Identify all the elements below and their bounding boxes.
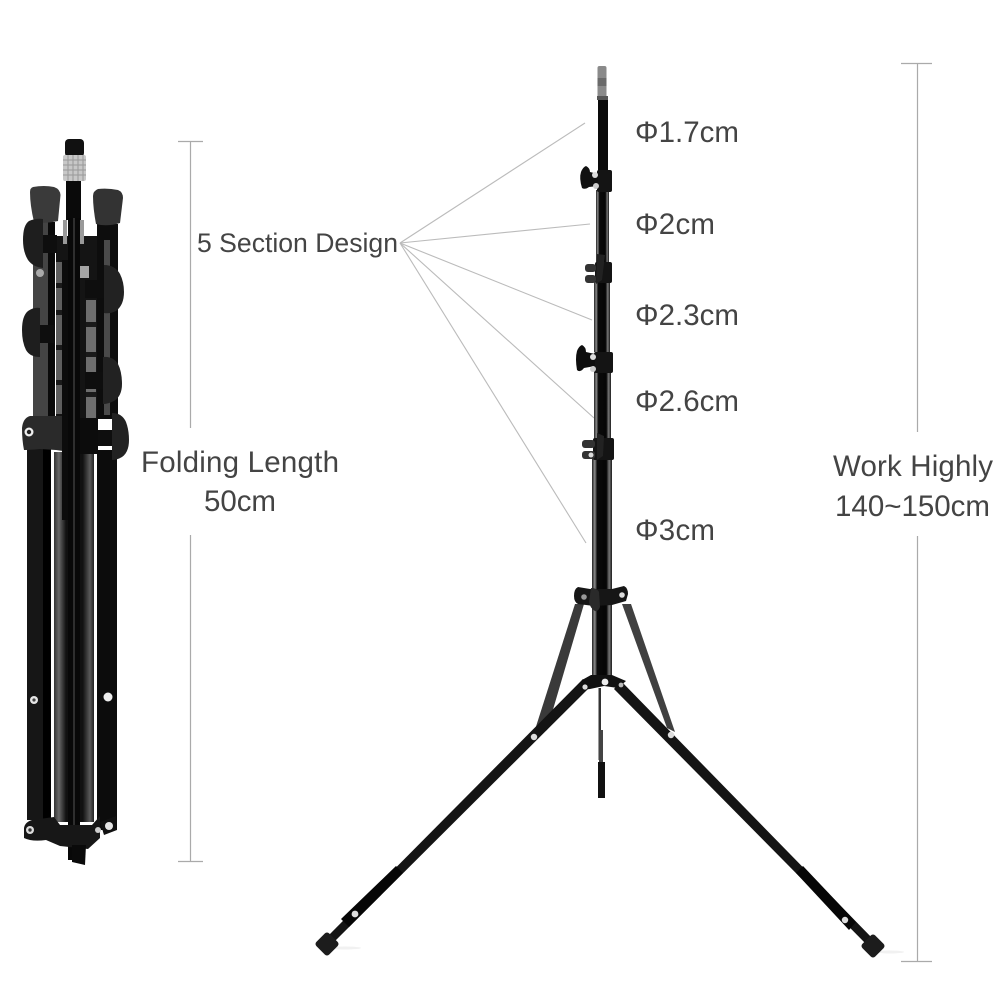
lower hub [580, 675, 626, 690]
left leg [314, 679, 590, 957]
working height dimension line [901, 63, 932, 962]
pole section 2 [596, 190, 609, 264]
folded top clamp [22, 416, 98, 454]
folded leg screws [30, 692, 113, 830]
leader lines to stand sections [400, 123, 594, 543]
folded stand photo [22, 139, 129, 865]
clamp 4 [582, 433, 614, 460]
diameter labels: Φ2.6cm [635, 385, 739, 418]
clamp 2 [585, 254, 612, 284]
upper collar [574, 586, 628, 611]
label: 5 section design: 5 Section Design [197, 228, 398, 258]
pole section 1 [598, 98, 608, 172]
stand floor shadows [329, 946, 904, 954]
left folded leg [27, 186, 60, 820]
pole top spigot [597, 66, 608, 100]
center column tube [54, 452, 94, 822]
left brace [533, 604, 584, 736]
right brace [622, 604, 675, 732]
label: work height: 140~150cm [835, 490, 990, 523]
extended stand photo [314, 66, 904, 959]
diameter labels [635, 116, 739, 547]
diameter labels: Φ1.7cm [635, 116, 739, 149]
folded spigot [63, 139, 86, 181]
diameter labels: Φ2cm [635, 208, 715, 241]
pole section 5 [592, 458, 612, 676]
label: folding length: 50cm [204, 485, 276, 518]
center spike [598, 688, 605, 798]
clamp 3 [576, 345, 613, 373]
right leg [614, 681, 886, 959]
diameter labels: Φ3cm [635, 514, 715, 547]
folded bottom bracket [24, 816, 117, 865]
label: folding length: Folding Length [141, 446, 339, 479]
folded clamp stack [36, 236, 97, 420]
pole section 4 [594, 372, 611, 440]
label: folding length [141, 446, 339, 518]
pole section 3 [594, 280, 610, 352]
label: work height: Work Highly [833, 450, 993, 483]
pole sections [592, 98, 612, 676]
folded locking knobs [22, 219, 129, 460]
center rail [62, 180, 84, 860]
clamp 1 [580, 166, 612, 192]
right folded leg [93, 189, 123, 830]
label: work height [833, 450, 993, 523]
diameter labels: Φ2.3cm [635, 299, 739, 332]
folded height dimension line [178, 141, 203, 862]
